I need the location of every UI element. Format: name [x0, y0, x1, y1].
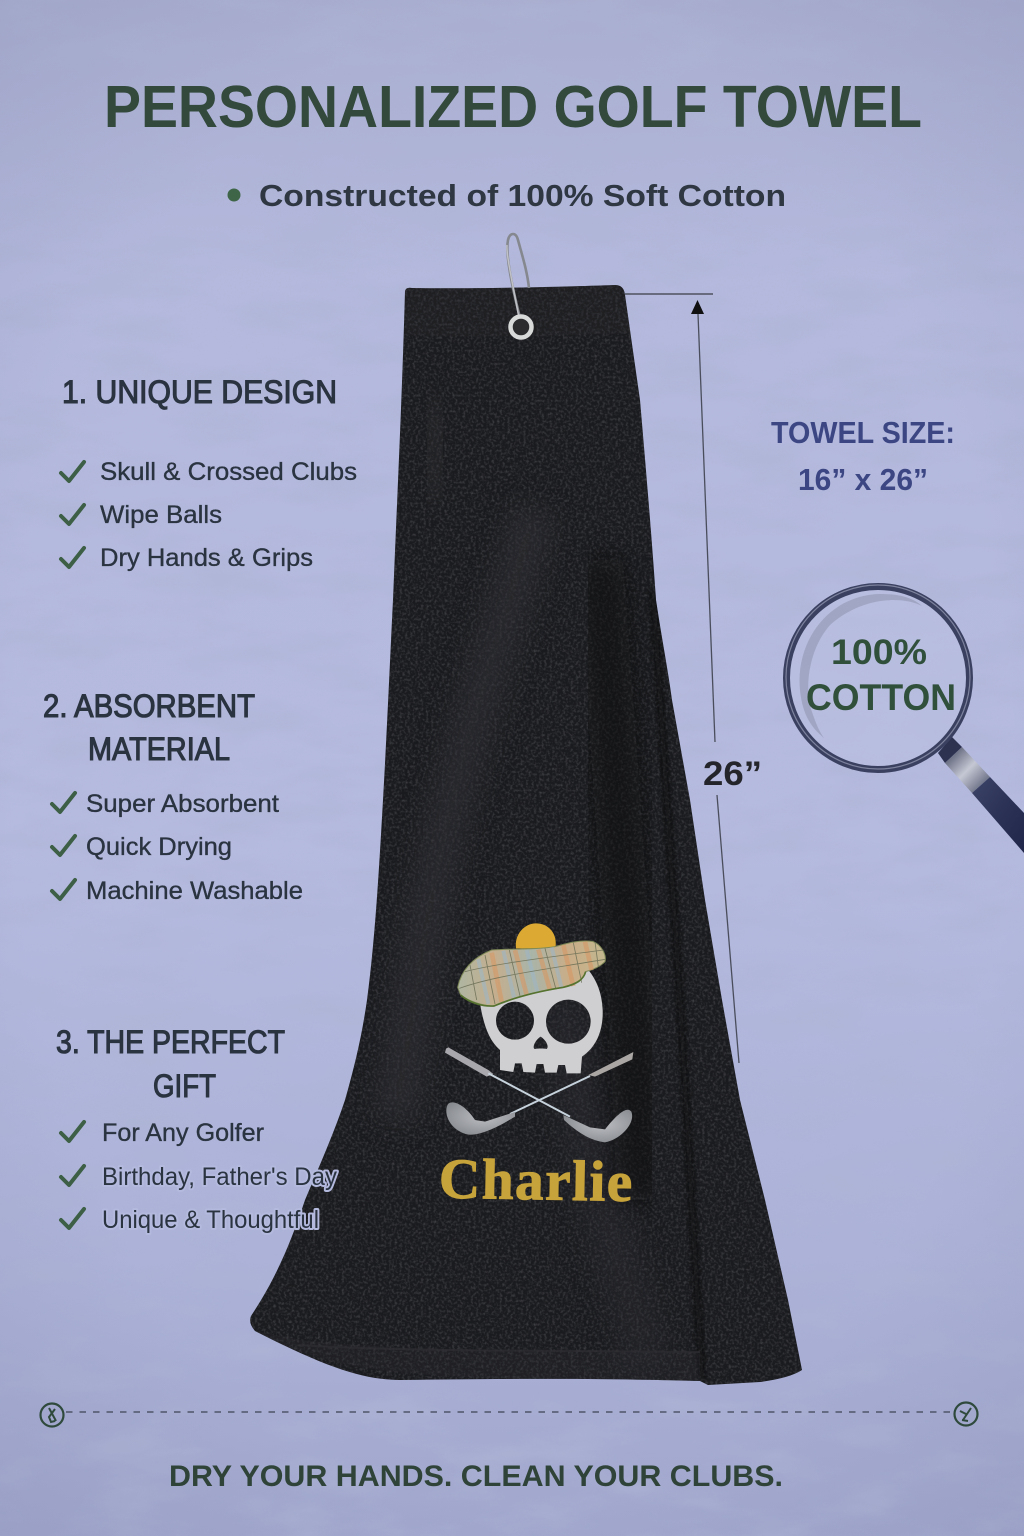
title: PERSONALIZED GOLF TOWEL	[104, 74, 922, 140]
lens	[788, 588, 968, 768]
lens rim	[786, 586, 970, 770]
footer tagline: DRY YOUR HANDS. CLEAN YOUR CLUBS.	[169, 1460, 783, 1493]
list 1	[61, 458, 357, 572]
list 2: Quick Drying	[86, 833, 232, 861]
list 1: Skull & Crossed Clubs	[100, 458, 357, 486]
lens text: 100%	[831, 633, 927, 672]
towel size label: TOWEL SIZE:	[771, 415, 955, 450]
skull	[480, 970, 603, 1073]
towel size label: 16” x 26”	[798, 462, 928, 497]
section 2: absorbent material	[43, 688, 303, 905]
dashed divider with golf icons	[40, 1402, 978, 1426]
towel texture and folds	[240, 280, 810, 1390]
list 2: Super Absorbent	[86, 790, 279, 818]
heading 2	[43, 688, 255, 767]
towel body	[250, 285, 802, 1385]
list 1: Wipe Balls	[100, 501, 222, 529]
cap pompom	[516, 923, 556, 948]
height label 26 inches: 26”	[703, 755, 762, 793]
heading 3	[56, 1024, 285, 1104]
lens text	[806, 633, 956, 718]
handle	[938, 737, 1024, 853]
list 3	[61, 1119, 337, 1234]
towel size label	[771, 415, 955, 497]
golf hook and grommet	[507, 234, 532, 338]
icon: right golf emblem	[954, 1402, 978, 1426]
list 3: For Any Golfer	[102, 1119, 264, 1147]
icon: left golf emblem	[40, 1404, 64, 1426]
subtitle with bullet: Constructed of 100% Soft Cotton	[259, 178, 786, 213]
list 3: Birthday, Father's Day	[102, 1163, 337, 1191]
list 3: Unique & Thoughtful	[102, 1206, 319, 1234]
heading 3: GIFT	[153, 1068, 216, 1104]
section 1: unique design	[61, 374, 357, 572]
heading 2: 2. ABSORBENT	[43, 688, 255, 724]
name: Charlie: Charlie	[438, 1148, 633, 1214]
heading 2: MATERIAL	[88, 731, 230, 767]
plaid flat cap	[458, 941, 605, 1006]
crossed golf clubs	[445, 1047, 633, 1142]
lens text: COTTON	[806, 677, 956, 718]
towel	[240, 280, 810, 1390]
heading 3: 3. THE PERFECT	[56, 1024, 285, 1060]
list 1: Dry Hands & Grips	[100, 544, 313, 572]
embroidery: skull, cap, crossed clubs, Charlie	[438, 923, 633, 1214]
dimension line: 26 inch height	[625, 294, 739, 1063]
section 3: the perfect gift	[56, 1024, 337, 1234]
list 2: Machine Washable	[86, 877, 303, 905]
heading 1: 1. UNIQUE DESIGN	[62, 374, 337, 410]
list 2	[52, 790, 303, 905]
magnifying glass: 100% cotton	[786, 585, 1024, 853]
